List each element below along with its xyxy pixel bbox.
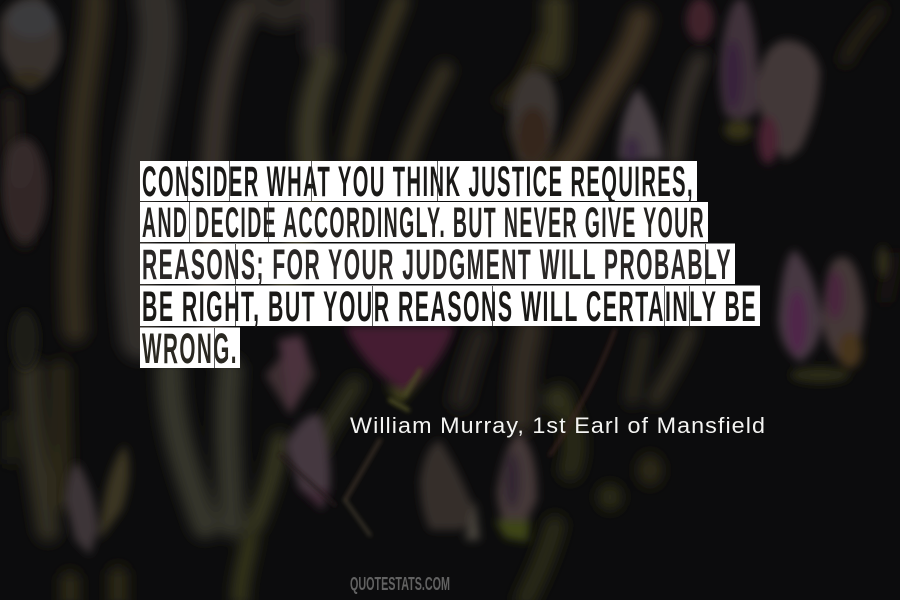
flower: top left (0, 0, 61, 90)
quote line 5 (140, 326, 240, 373)
flower: tall bud (618, 88, 663, 160)
flower: right pair (778, 250, 822, 362)
attribution: William Murray, 1st Earl of Mansfield (350, 413, 766, 438)
quote text block (140, 159, 760, 373)
flower: lower left (65, 463, 98, 555)
background: soft twigs (280, 330, 615, 535)
flower: top right (720, 0, 758, 119)
site credit: QUOTESTATS.COM (350, 574, 450, 594)
flower: upper centre (510, 70, 557, 165)
flower: left centre pair (265, 335, 315, 415)
flower: centre magenta (345, 326, 455, 392)
quote text block: WRONG. (142, 326, 238, 373)
flower: lower centre (420, 440, 478, 530)
